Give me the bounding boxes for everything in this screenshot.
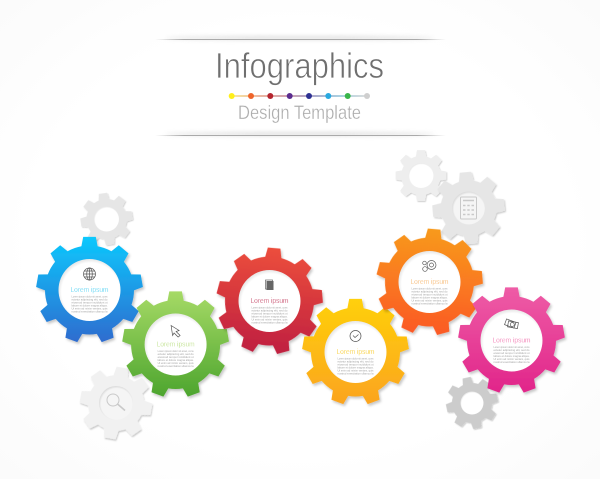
- body text: Lorem ipsum dolor sit amet, cons: [494, 345, 530, 349]
- body text: Ut enim ad minim veniam, quis: [494, 357, 530, 361]
- header block: [155, 36, 446, 136]
- gear: red: [212, 243, 327, 358]
- bottom rule: [155, 132, 446, 136]
- body text: ectetur adipiscing elit, sed do: [412, 290, 448, 294]
- icon: money: [505, 319, 518, 329]
- body text: ectetur adipiscing elit, sed do: [252, 308, 288, 312]
- body text: nostrud exercitation ullamco la: [158, 364, 194, 368]
- body text: eiusmod tempor incididunt ut: [252, 312, 288, 316]
- body text: Ut enim ad minim veniam, quis: [412, 298, 448, 302]
- heading: Lorem ipsum: [250, 296, 288, 305]
- body text: Ut enim ad minim veniam, quis: [252, 318, 288, 322]
- title: Infographics: [215, 45, 384, 86]
- body text: labore et dolore magna aliqua.: [158, 358, 194, 362]
- top rule: [155, 36, 446, 40]
- body text: [338, 356, 374, 376]
- body text: [72, 294, 108, 314]
- subtitle: Design Template: [238, 102, 361, 124]
- heading: Lorem ipsum: [70, 285, 108, 294]
- body text: nostrud exercitation ullamco la: [494, 360, 530, 364]
- gray gear: calculator: [430, 169, 507, 247]
- body text: Lorem ipsum dolor sit amet, cons: [338, 356, 374, 360]
- body text: labore et dolore magna aliqua.: [252, 314, 288, 318]
- body text: eiusmod tempor incididunt ut: [72, 300, 108, 304]
- body text: labore et dolore magna aliqua.: [72, 304, 108, 308]
- body text: [412, 286, 448, 306]
- gear: blue: [36, 237, 143, 342]
- gray gear: top right small: [396, 150, 446, 201]
- body text: ectetur adipiscing elit, sed do: [158, 352, 194, 356]
- gray gear: magnifier: [74, 361, 158, 445]
- icon: document: [266, 280, 274, 290]
- icon: globe: [84, 268, 96, 280]
- body text: ectetur adipiscing elit, sed do: [494, 348, 530, 352]
- body text: [494, 345, 530, 364]
- body text: nostrud exercitation ullamco la: [72, 310, 108, 314]
- gray gear: top left small: [77, 190, 136, 248]
- body text: Lorem ipsum dolor sit amet, cons: [158, 349, 194, 353]
- body text: labore et dolore magna aliqua.: [338, 366, 374, 370]
- heading: Lorem ipsum: [336, 347, 374, 356]
- body text: [252, 306, 288, 324]
- icon: calculator: [460, 197, 476, 219]
- body text: Lorem ipsum dolor sit amet, cons: [252, 306, 288, 310]
- body text: labore et dolore magna aliqua.: [412, 296, 448, 300]
- body text: eiusmod tempor incididunt ut: [412, 292, 448, 296]
- body text: ectetur adipiscing elit, sed do: [338, 360, 374, 364]
- body text: Lorem ipsum dolor sit amet, cons: [72, 294, 108, 298]
- colored dot line: [229, 93, 370, 99]
- gray gear: bottom right: [441, 372, 503, 434]
- gear: orange: [372, 224, 487, 339]
- icon: clock: [350, 330, 361, 342]
- body text: nostrud exercitation ullamco la: [338, 372, 374, 376]
- gear: yellow: [302, 299, 409, 404]
- body text: nostrud exercitation ullamco la: [252, 320, 288, 324]
- heading: Lorem ipsum: [492, 336, 530, 344]
- body text: nostrud exercitation ullamco la: [412, 302, 448, 306]
- body text: Ut enim ad minim veniam, quis: [72, 306, 108, 310]
- body text: eiusmod tempor incididunt ut: [494, 351, 530, 355]
- icon: magnifier: [107, 394, 125, 410]
- body text: Lorem ipsum dolor sit amet, cons: [412, 286, 448, 290]
- body text: [158, 349, 194, 368]
- body text: Ut enim ad minim veniam, quis: [338, 368, 374, 372]
- body text: eiusmod tempor incididunt ut: [338, 362, 374, 366]
- gear: pink: [458, 287, 565, 393]
- icon: cogs: [423, 260, 436, 271]
- body text: ectetur adipiscing elit, sed do: [72, 298, 108, 302]
- body text: eiusmod tempor incididunt ut: [158, 355, 194, 359]
- body text: Ut enim ad minim veniam, quis: [158, 361, 194, 365]
- gear: green: [122, 291, 229, 397]
- heading: Lorem ipsum: [410, 277, 448, 286]
- icon: cursor: [171, 326, 180, 337]
- body text: labore et dolore magna aliqua.: [494, 354, 530, 358]
- heading: Lorem ipsum: [157, 340, 195, 348]
